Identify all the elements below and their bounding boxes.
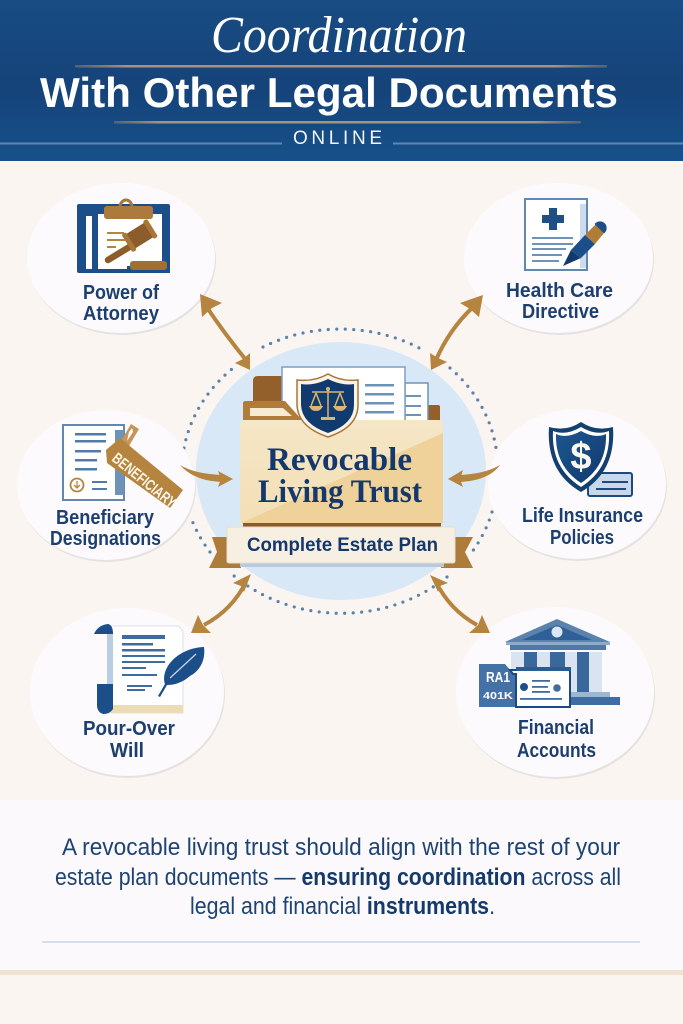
label: Health Care Directive [506, 280, 613, 323]
label: Beneficiary Designations: Beneficiary [56, 507, 155, 529]
panel: Pour-Over Will [30, 608, 225, 778]
title: Coordination: Coordination [211, 7, 467, 64]
heading: Revocable Living Trust: Living Trust [258, 474, 422, 510]
panel: Health Care Directive [464, 183, 654, 335]
ribbon: Complete Estate Plan: Complete Estate Plan [247, 535, 438, 556]
subtitle: ONLINE: ONLINE [293, 128, 382, 149]
arrow: Pour-Over Will to trust [191, 574, 251, 633]
icon: medical document and pen [525, 199, 606, 270]
arrow: Beneficiary Designations to trust [180, 465, 233, 487]
arrow: Financial Accounts to trust [430, 575, 490, 633]
folder body [240, 420, 443, 524]
label: Pour-Over Will: Pour-Over [83, 718, 175, 740]
ribbon: Complete Estate Plan [209, 527, 473, 568]
label: Financial Accounts: Financial [518, 717, 594, 739]
header banner [0, 0, 683, 161]
icon: document with beneficiary tag [63, 424, 183, 512]
summary paragraph: A revocable living trust should align with the rest of your [62, 834, 620, 861]
panel: Financial Accounts [456, 607, 655, 779]
centerpiece: Revocable Living Trust folder [240, 367, 443, 529]
icon: shield and check [549, 422, 632, 496]
label: Life Insurance Policies [522, 505, 643, 549]
arrow: Life Insurance Policies to trust [448, 465, 500, 487]
documents in folder [282, 367, 428, 425]
label: Life Insurance Policies: Life Insurance [522, 505, 643, 527]
icon: clipboard and gavel [77, 200, 170, 273]
label: Pour-Over Will: Will [110, 740, 144, 762]
label: Health Care Directive: Health Care [506, 280, 613, 302]
panel: Beneficiary Designations [17, 410, 196, 562]
icon: bank and account cards [479, 619, 620, 707]
label: Beneficiary Designations: Designations [50, 528, 161, 550]
panel: Power of Attorney [27, 183, 216, 335]
summary paragraph: estate plan documents — ensuring coordination across all [55, 864, 621, 891]
label: Health Care Directive: Directive [522, 301, 599, 323]
arrow: Power of Attorney to trust [200, 294, 250, 370]
icon: document with beneficiary tag: BENEFICIARY [108, 450, 179, 512]
icon: shield with scales [297, 374, 358, 437]
heading: Revocable Living Trust [258, 442, 422, 510]
label: Life Insurance Policies: Policies [550, 527, 614, 549]
label: Power of Attorney [83, 282, 160, 325]
arrow: Health Care Directive to trust [430, 295, 483, 370]
dotted ring [184, 329, 496, 613]
label: Financial Accounts: Accounts [517, 740, 596, 762]
icon: bank and account cards: 401K [483, 690, 513, 702]
icon: shield and check: $ [570, 436, 592, 478]
label: Beneficiary Designations [50, 507, 161, 550]
central blue circle [196, 342, 486, 600]
label: Power of Attorney: Power of [83, 282, 159, 304]
panel: summary text [0, 800, 683, 975]
label: Financial Accounts [517, 717, 596, 762]
folder back tabs [253, 376, 285, 405]
title: With Other Legal Documents: With Other Legal Documents [40, 69, 618, 116]
label: Pour-Over Will [83, 718, 175, 762]
panel: Life Insurance Policies [488, 409, 667, 561]
summary paragraph: legal and financial instruments. [190, 893, 495, 920]
heading: Revocable Living Trust: Revocable [267, 442, 412, 478]
icon: scroll and quill [94, 624, 204, 714]
label: Power of Attorney: Attorney [83, 303, 160, 325]
icon: bank and account cards: RA1 [486, 669, 510, 686]
summary paragraph [55, 834, 621, 920]
